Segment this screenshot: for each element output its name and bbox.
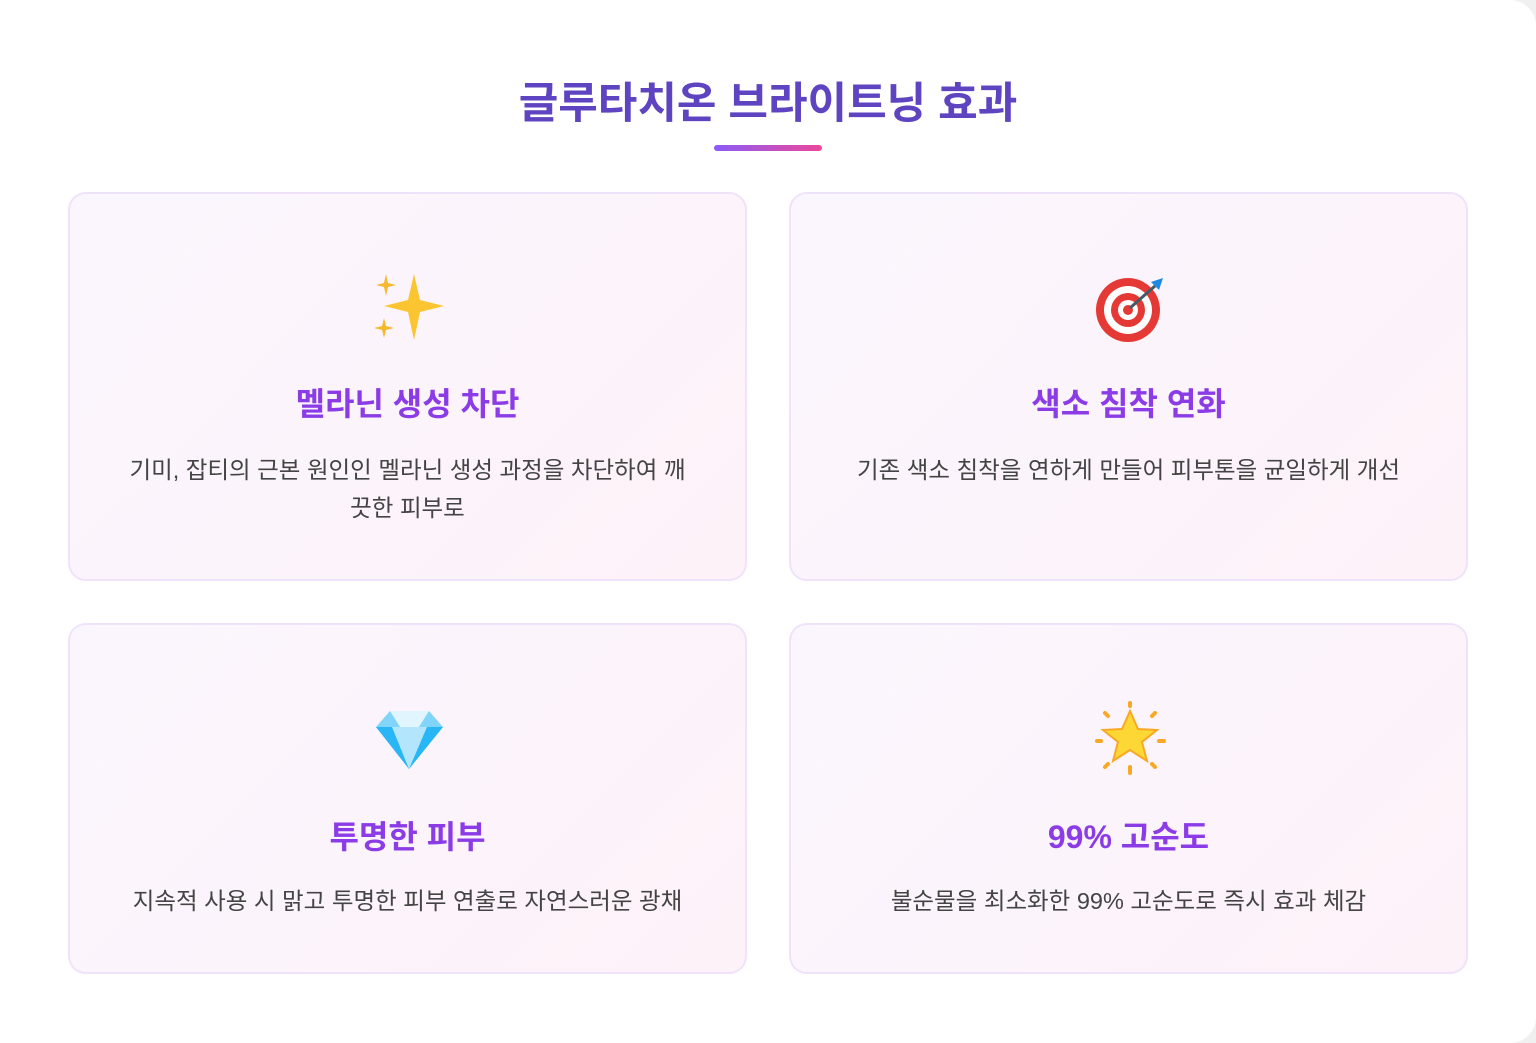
card title: 멜라닌 생성 차단 bbox=[296, 386, 519, 422]
card description: 지속적 사용 시 맑고 투명한 피부 연출로 자연스러운 광채 bbox=[133, 888, 682, 914]
card description: 기미, 잡티의 근본 원인인 멜라닌 생성 과정을 차단하여 깨끗한 피부로 bbox=[129, 457, 686, 521]
card title: 색소 침착 연화 bbox=[1031, 386, 1226, 422]
icon: sparkles bbox=[374, 274, 444, 340]
card title: 99% 고순도 bbox=[1048, 819, 1209, 855]
card description: 불순물을 최소화한 99% 고순도로 즉시 효과 체감 bbox=[891, 888, 1366, 914]
icon: diamond bbox=[376, 711, 443, 769]
panel: pigment bbox=[789, 192, 1468, 581]
title: 글루타치온 브라이트닝 효과 bbox=[519, 80, 1017, 128]
icon: star bbox=[1095, 701, 1166, 775]
panel: clear skin bbox=[68, 623, 747, 974]
icon: target bbox=[1096, 278, 1163, 342]
card description: 기존 색소 침착을 연하게 만들어 피부톤을 균일하게 개선 bbox=[857, 457, 1400, 483]
title underline bbox=[714, 145, 822, 151]
card title: 투명한 피부 bbox=[329, 819, 486, 855]
panel: melanin bbox=[68, 192, 747, 581]
panel: purity bbox=[789, 623, 1468, 974]
